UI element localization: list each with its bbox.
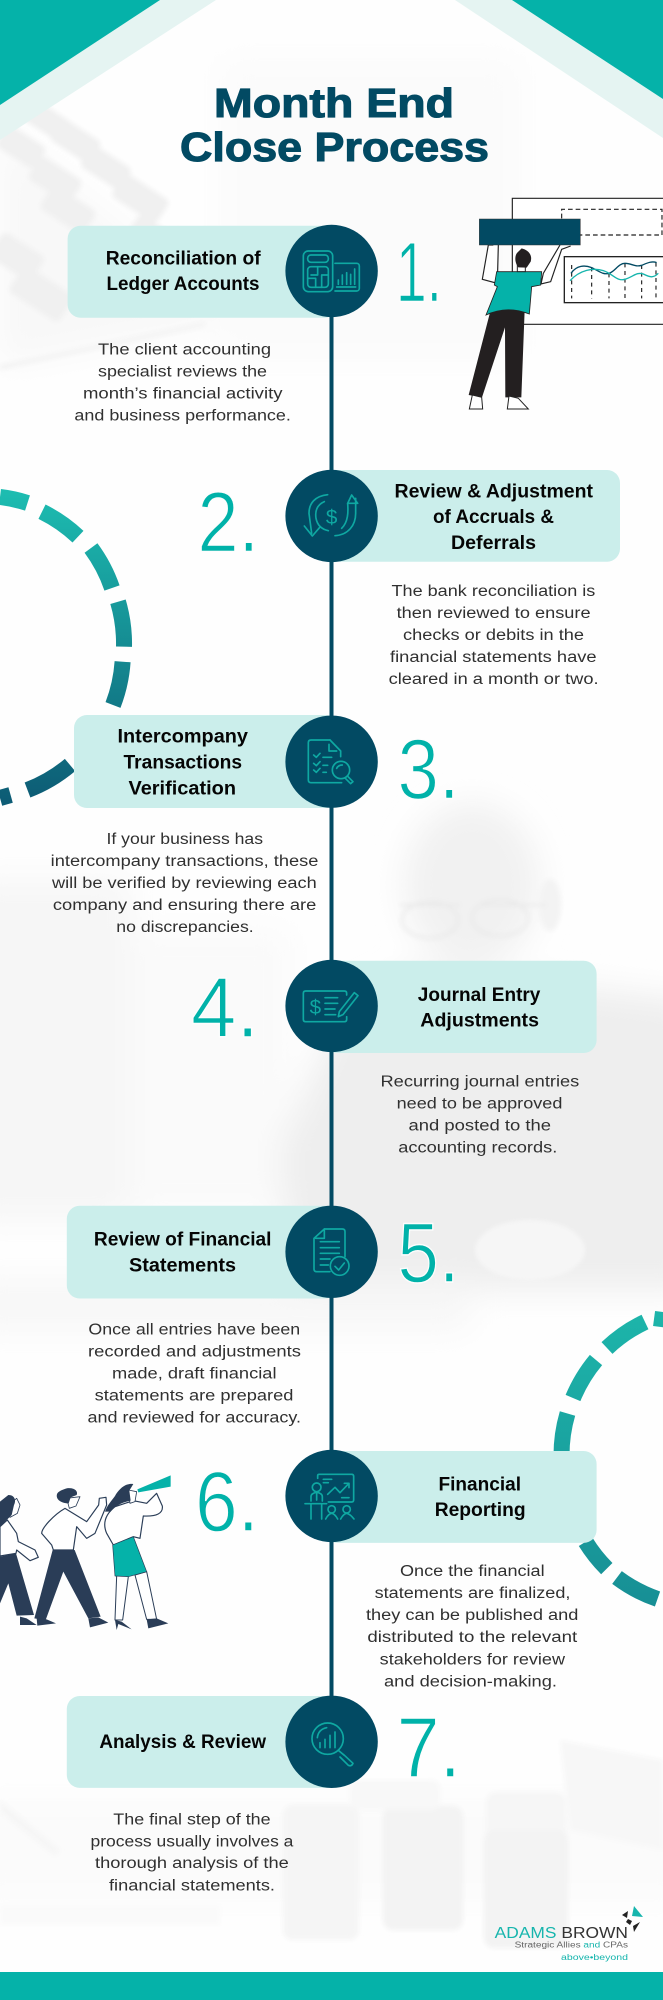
step 6 heading pill <box>325 1451 597 1543</box>
step 5 number: 5. <box>398 1206 460 1301</box>
step 4 body text <box>380 1073 580 1156</box>
step 6 heading: Reporting <box>435 1499 526 1521</box>
step 6 number: 6. <box>195 1455 259 1550</box>
step 3 body text: no discrepancies. <box>116 919 254 936</box>
step 6 body text: distributed to the relevant <box>367 1629 578 1646</box>
step 3 body text <box>51 831 318 936</box>
logo wordmark: ADAMS BROWN <box>495 1925 628 1942</box>
step 3 badge <box>285 716 378 808</box>
step 3 body text: If your business has <box>106 831 263 848</box>
step 4 heading: Journal Entry <box>418 984 540 1006</box>
step 1 heading: Ledger Accounts <box>106 273 260 295</box>
step 4 heading pill <box>325 961 597 1053</box>
step 7 body text: financial statements. <box>109 1877 275 1894</box>
step 7 body text: The final step of the <box>113 1811 271 1828</box>
illustration: team with megaphone <box>0 1475 171 1630</box>
step 1 body text: month’s financial activity <box>83 385 283 402</box>
step 2 number: 2. <box>198 476 259 571</box>
panel: step 7 <box>67 1696 461 1894</box>
icon: magnifier with bars <box>312 1723 353 1766</box>
step 7 body text: process usually involves a <box>90 1833 294 1850</box>
step 6 body text: and decision-making. <box>384 1673 557 1690</box>
step 3 heading <box>118 726 248 799</box>
left figure <box>0 1495 38 1625</box>
step 7 body text: thorough analysis of the <box>95 1855 289 1872</box>
person head <box>515 248 531 268</box>
step 6 body text: Once the financial <box>400 1563 545 1580</box>
step 1 body text: specialist reviews the <box>98 363 267 380</box>
step 6 body text: statements are finalized, <box>375 1585 570 1602</box>
step 7 badge <box>285 1696 378 1788</box>
step 5 body text: made, draft financial <box>112 1365 276 1382</box>
step 3 heading: Verification <box>128 777 236 799</box>
step 2 body text <box>389 583 599 688</box>
icon: dollar with cycle arrows: $ <box>326 506 338 529</box>
step 4 number: 4. <box>191 961 259 1056</box>
step 1 body text <box>74 341 291 424</box>
step 5 body text: recorded and adjustments <box>88 1343 301 1360</box>
step 5 heading pill <box>67 1206 338 1298</box>
panel: step 2 <box>198 470 620 688</box>
panel: step 4 <box>191 960 597 1156</box>
step 2 heading <box>394 480 593 554</box>
step 7 body text <box>90 1811 294 1894</box>
step 7 number: 7. <box>397 1701 461 1796</box>
footer bar <box>0 1972 663 2000</box>
title: Close Process <box>180 124 489 170</box>
step 3 heading: Transactions <box>124 751 242 773</box>
step 2 body text: then reviewed to ensure <box>397 605 591 622</box>
step 1 body text: and business performance. <box>74 407 291 424</box>
panel: step 3 <box>51 715 459 936</box>
step 5 heading: Statements <box>129 1254 236 1276</box>
person neck <box>517 265 525 272</box>
right figure <box>105 1475 171 1630</box>
logo subtitle: Strategic Allies and CPAs <box>515 1940 628 1950</box>
step 1 body text: The client accounting <box>98 341 271 358</box>
step 6 heading <box>435 1473 526 1521</box>
step 3 body text: will be verified by reviewing each <box>51 875 317 892</box>
icon: signed cheque: $ <box>310 996 322 1019</box>
step 7 heading: Analysis & Review <box>99 1731 267 1753</box>
held block <box>479 219 580 245</box>
step 1 badge <box>285 225 378 317</box>
icon: dollar with cycle arrows <box>304 495 358 536</box>
step 3 body text: company and ensuring there are <box>53 897 316 914</box>
icon: calculator and chart <box>303 251 359 292</box>
step 3 heading pill <box>74 715 338 808</box>
person shirt <box>486 272 542 315</box>
presentation board <box>512 198 663 324</box>
step 2 body text: financial statements have <box>390 649 597 666</box>
step 2 body text: The bank reconciliation is <box>392 583 596 600</box>
step 4 heading <box>418 984 540 1031</box>
step 6 body text <box>366 1563 578 1690</box>
panel: step 6 <box>195 1450 597 1690</box>
panel: step 1 <box>68 225 442 424</box>
icon: signed cheque <box>303 991 358 1022</box>
step 5 body text: Once all entries have been <box>88 1321 300 1338</box>
step 6 body text: stakeholders for review <box>380 1651 566 1668</box>
step 2 heading: of Accruals & <box>433 506 554 528</box>
step 5 body text: and reviewed for accuracy. <box>88 1409 301 1426</box>
step 1 number: 1. <box>396 226 442 321</box>
step 6 heading: Financial <box>438 1473 521 1495</box>
panel: step 5 <box>67 1206 460 1426</box>
step 3 body text: intercompany transactions, these <box>51 853 318 870</box>
step 2 heading pill <box>325 470 620 562</box>
step 4 heading: Adjustments <box>420 1009 539 1031</box>
dashed circle left <box>0 497 124 798</box>
step 3 number: 3. <box>398 722 460 817</box>
step 1 heading: Reconciliation of <box>106 247 261 269</box>
step 5 heading <box>94 1228 272 1276</box>
step 4 body text: Recurring journal entries <box>380 1073 580 1090</box>
logo mark <box>622 1906 643 1932</box>
step 5 body text <box>88 1321 301 1426</box>
step 7 heading pill <box>67 1696 338 1788</box>
step 2 heading: Review & Adjustment <box>394 480 593 502</box>
step 1 heading <box>106 247 261 295</box>
centre figure <box>34 1488 108 1627</box>
title: Month End <box>214 80 454 126</box>
person shoes <box>469 395 528 409</box>
title <box>180 80 489 170</box>
step 2 badge <box>285 470 378 562</box>
step 2 heading: Deferrals <box>451 532 536 554</box>
step 6 body text: they can be published and <box>366 1607 578 1624</box>
illustration: person with chart board <box>469 198 663 409</box>
dashed placeholder <box>562 209 662 235</box>
icon: approved document <box>314 1229 349 1275</box>
step 4 badge <box>285 960 378 1052</box>
top left corner banner <box>0 0 216 140</box>
icon: presenter with chart <box>305 1474 354 1519</box>
logo: Adams Brown <box>495 1906 643 1962</box>
step 6 badge <box>285 1450 378 1542</box>
step 4 body text: need to be approved <box>397 1095 562 1112</box>
chart panel <box>564 257 663 303</box>
step 4 body text: accounting records. <box>398 1140 557 1156</box>
step 5 badge <box>285 1206 378 1298</box>
step 4 body text: and posted to the <box>408 1117 551 1134</box>
step 1 heading pill <box>68 226 338 318</box>
step 3 heading: Intercompany <box>118 726 248 748</box>
top right corner banner <box>455 0 663 138</box>
dashed circle right <box>561 1312 663 1599</box>
timeline spine <box>330 271 334 1742</box>
step 5 body text: statements are prepared <box>95 1387 293 1404</box>
icon: checklist with magnifier <box>308 740 353 784</box>
step 2 body text: checks or debits in the <box>403 627 584 644</box>
step 2 body text: cleared in a month or two. <box>389 671 599 688</box>
step 5 heading: Review of Financial <box>94 1228 272 1250</box>
person legs <box>469 310 525 397</box>
person arms <box>482 245 571 284</box>
logo tagline: above•beyond <box>561 1953 628 1962</box>
